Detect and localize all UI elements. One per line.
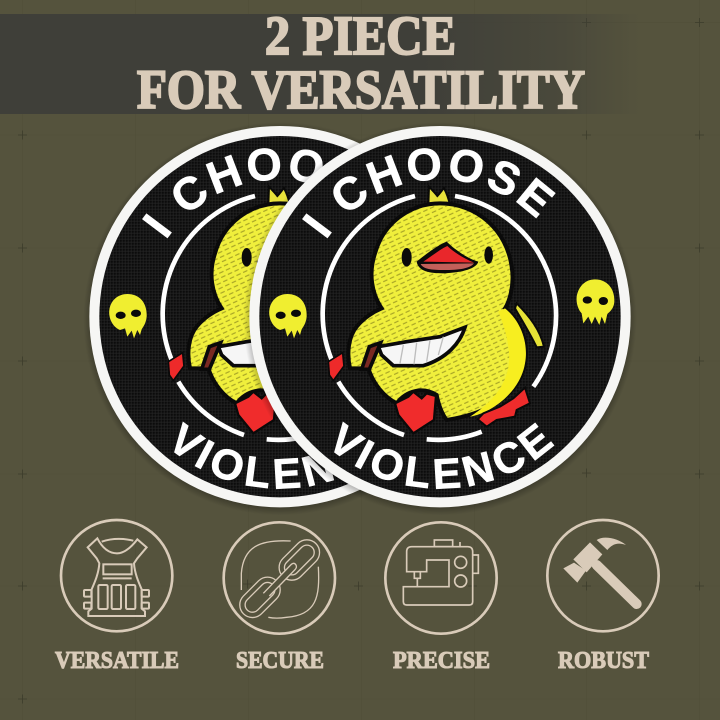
patch: front: [244, 125, 634, 512]
knife blade: [378, 327, 465, 366]
label: SECURE: SECURE: [236, 648, 324, 674]
title: [137, 5, 585, 120]
left foot: [395, 392, 436, 433]
title line 2: FOR VERSATILITY: [137, 59, 585, 120]
patch: back: VIOLENCE: [174, 422, 334, 490]
text: VIOLENCE: VIOLENCE: [334, 422, 554, 490]
label: ROBUST: ROBUST: [558, 648, 649, 674]
knife handle: [362, 343, 381, 369]
right foot: [478, 388, 530, 427]
text: I CHOOSE: I CHOOSE: [302, 148, 556, 238]
icon: chain: [224, 522, 335, 634]
patch: back: [86, 125, 364, 512]
hand tip: [328, 353, 344, 381]
beak: [417, 242, 478, 273]
label: VERSATILE: VERSATILE: [55, 648, 179, 674]
header band: [0, 14, 640, 114]
duck body: [348, 203, 526, 420]
patch: back: I CHOOSE: [142, 148, 323, 238]
patch fabric: [259, 136, 621, 497]
icon: vest: [61, 520, 172, 631]
icon: sewing machine: [385, 522, 497, 634]
patch border: [249, 126, 631, 507]
icon: right skull: [577, 279, 614, 325]
duck tuft: [428, 187, 450, 205]
duck eyes: [402, 246, 493, 267]
duck tail: [515, 303, 544, 347]
white ring: [323, 196, 556, 440]
icon: left skull: [269, 294, 307, 338]
title line 1: 2 PIECE: [265, 5, 456, 66]
icon: hammer: [547, 520, 659, 631]
label: PRECISE: PRECISE: [393, 648, 490, 674]
duck belly highlight: [470, 308, 526, 417]
